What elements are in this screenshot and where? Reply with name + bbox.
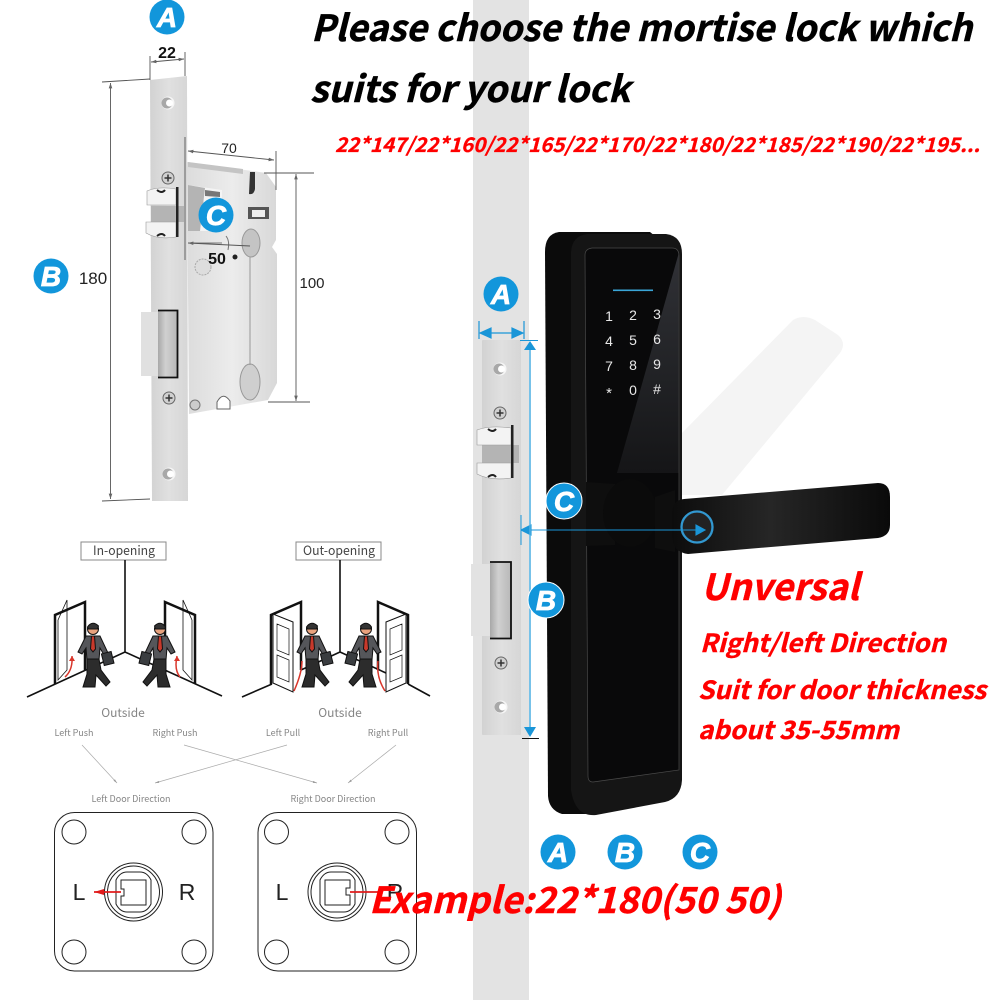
legend badge A: A (547, 837, 568, 868)
latch (477, 425, 519, 479)
label right push: Right Push (153, 726, 197, 739)
dimension 22: 22 (158, 45, 176, 62)
title: Please choose the mortise lock which (311, 0, 974, 52)
ghost handle (682, 317, 843, 495)
dimension lines (102, 52, 314, 501)
left door plate (54, 812, 213, 971)
fingerprint ring (682, 512, 712, 542)
keypad (605, 306, 661, 402)
glass reflection (617, 254, 678, 473)
caption outside: Outside (101, 704, 145, 721)
title second line: suits for your lock (310, 61, 634, 113)
keypad: 7 (605, 358, 613, 374)
door edge strip (473, 0, 529, 1000)
badge B (34, 258, 68, 294)
keypad: 2 (629, 307, 637, 323)
panel: smart lock (521, 232, 890, 815)
right door plate: L (276, 879, 289, 905)
size list: 22*147/22*160/22*165/22*170/22*180/22*185/22*190/22*195... (335, 129, 980, 158)
legend badge B (608, 834, 642, 870)
rose and neck (586, 479, 675, 552)
feature thickness range: about 35-55mm (698, 711, 901, 747)
dimension 180: 180 (79, 269, 107, 288)
legend badge C (682, 834, 718, 870)
handle (672, 483, 890, 554)
badge B: B (536, 585, 556, 616)
legend badge B: B (615, 837, 635, 868)
badge B: B (41, 261, 61, 292)
feature heading: Unversal (701, 559, 864, 611)
keypad: 6 (653, 331, 661, 347)
latch (146, 187, 184, 238)
legend badge A (540, 834, 576, 870)
keypad: 9 (653, 356, 661, 372)
badge A: A (490, 279, 511, 310)
faceplate (482, 340, 521, 735)
keypad: # (653, 381, 661, 397)
caption outside: Outside (318, 704, 362, 721)
keypad: 1 (605, 308, 613, 324)
screws (494, 362, 508, 714)
example text: Example:22*180(50 50) (369, 872, 783, 924)
badge C: C (554, 486, 575, 517)
keypad: 3 (653, 306, 661, 322)
dimension 100: 100 (299, 275, 325, 292)
badge A (150, 0, 184, 34)
lock body (187, 162, 277, 414)
badge A (484, 276, 518, 312)
right door plate: R (387, 879, 403, 905)
back plate (545, 232, 660, 814)
in-opening label: In-opening (93, 540, 156, 559)
keypad: 8 (629, 357, 637, 373)
glass panel (585, 248, 679, 782)
left door plate: R (179, 879, 195, 905)
legend badge C: C (690, 837, 711, 868)
keypad: 4 (605, 333, 613, 349)
dimension A arrow (479, 321, 524, 339)
keypad: 0 (629, 382, 637, 398)
dead bolt (471, 562, 511, 639)
body details (188, 162, 269, 410)
keypad: 5 (629, 332, 637, 348)
right door plate (258, 812, 416, 971)
keypad: * (606, 385, 612, 402)
feature door thickness: Suit for door thickness (698, 671, 989, 707)
badge C (546, 483, 582, 519)
feature direction: Right/left Direction (700, 624, 948, 660)
label left push: Left Push (55, 726, 93, 739)
label right door direction: Right Door Direction (290, 792, 376, 805)
badge A: A (156, 2, 177, 33)
badge B (528, 582, 564, 618)
dimension B arrow (520, 340, 539, 738)
dimension C line (521, 525, 705, 535)
panel: door opening direction diagrams (27, 540, 430, 971)
badge C: C (206, 200, 227, 231)
left door plate: L (73, 879, 86, 905)
panel: mortise faceplate (471, 321, 539, 738)
label left pull: Left Pull (266, 726, 301, 739)
out-opening scene (242, 560, 430, 697)
label right pull: Right Pull (368, 726, 409, 739)
dimension 70: 70 (221, 140, 237, 156)
badge C (198, 198, 234, 232)
in-opening scene (27, 560, 222, 697)
indicator bar (613, 290, 653, 291)
faceplate (150, 76, 188, 501)
direction arrows (82, 745, 396, 783)
faceplate screws (162, 96, 176, 480)
out-opening label: Out-opening (303, 540, 376, 559)
dead bolt (141, 310, 178, 378)
label left door direction: Left Door Direction (91, 792, 171, 805)
panel: mortise lock with dimensions (79, 45, 325, 501)
front plate (571, 234, 682, 815)
dimension 50: 50 (208, 251, 226, 268)
